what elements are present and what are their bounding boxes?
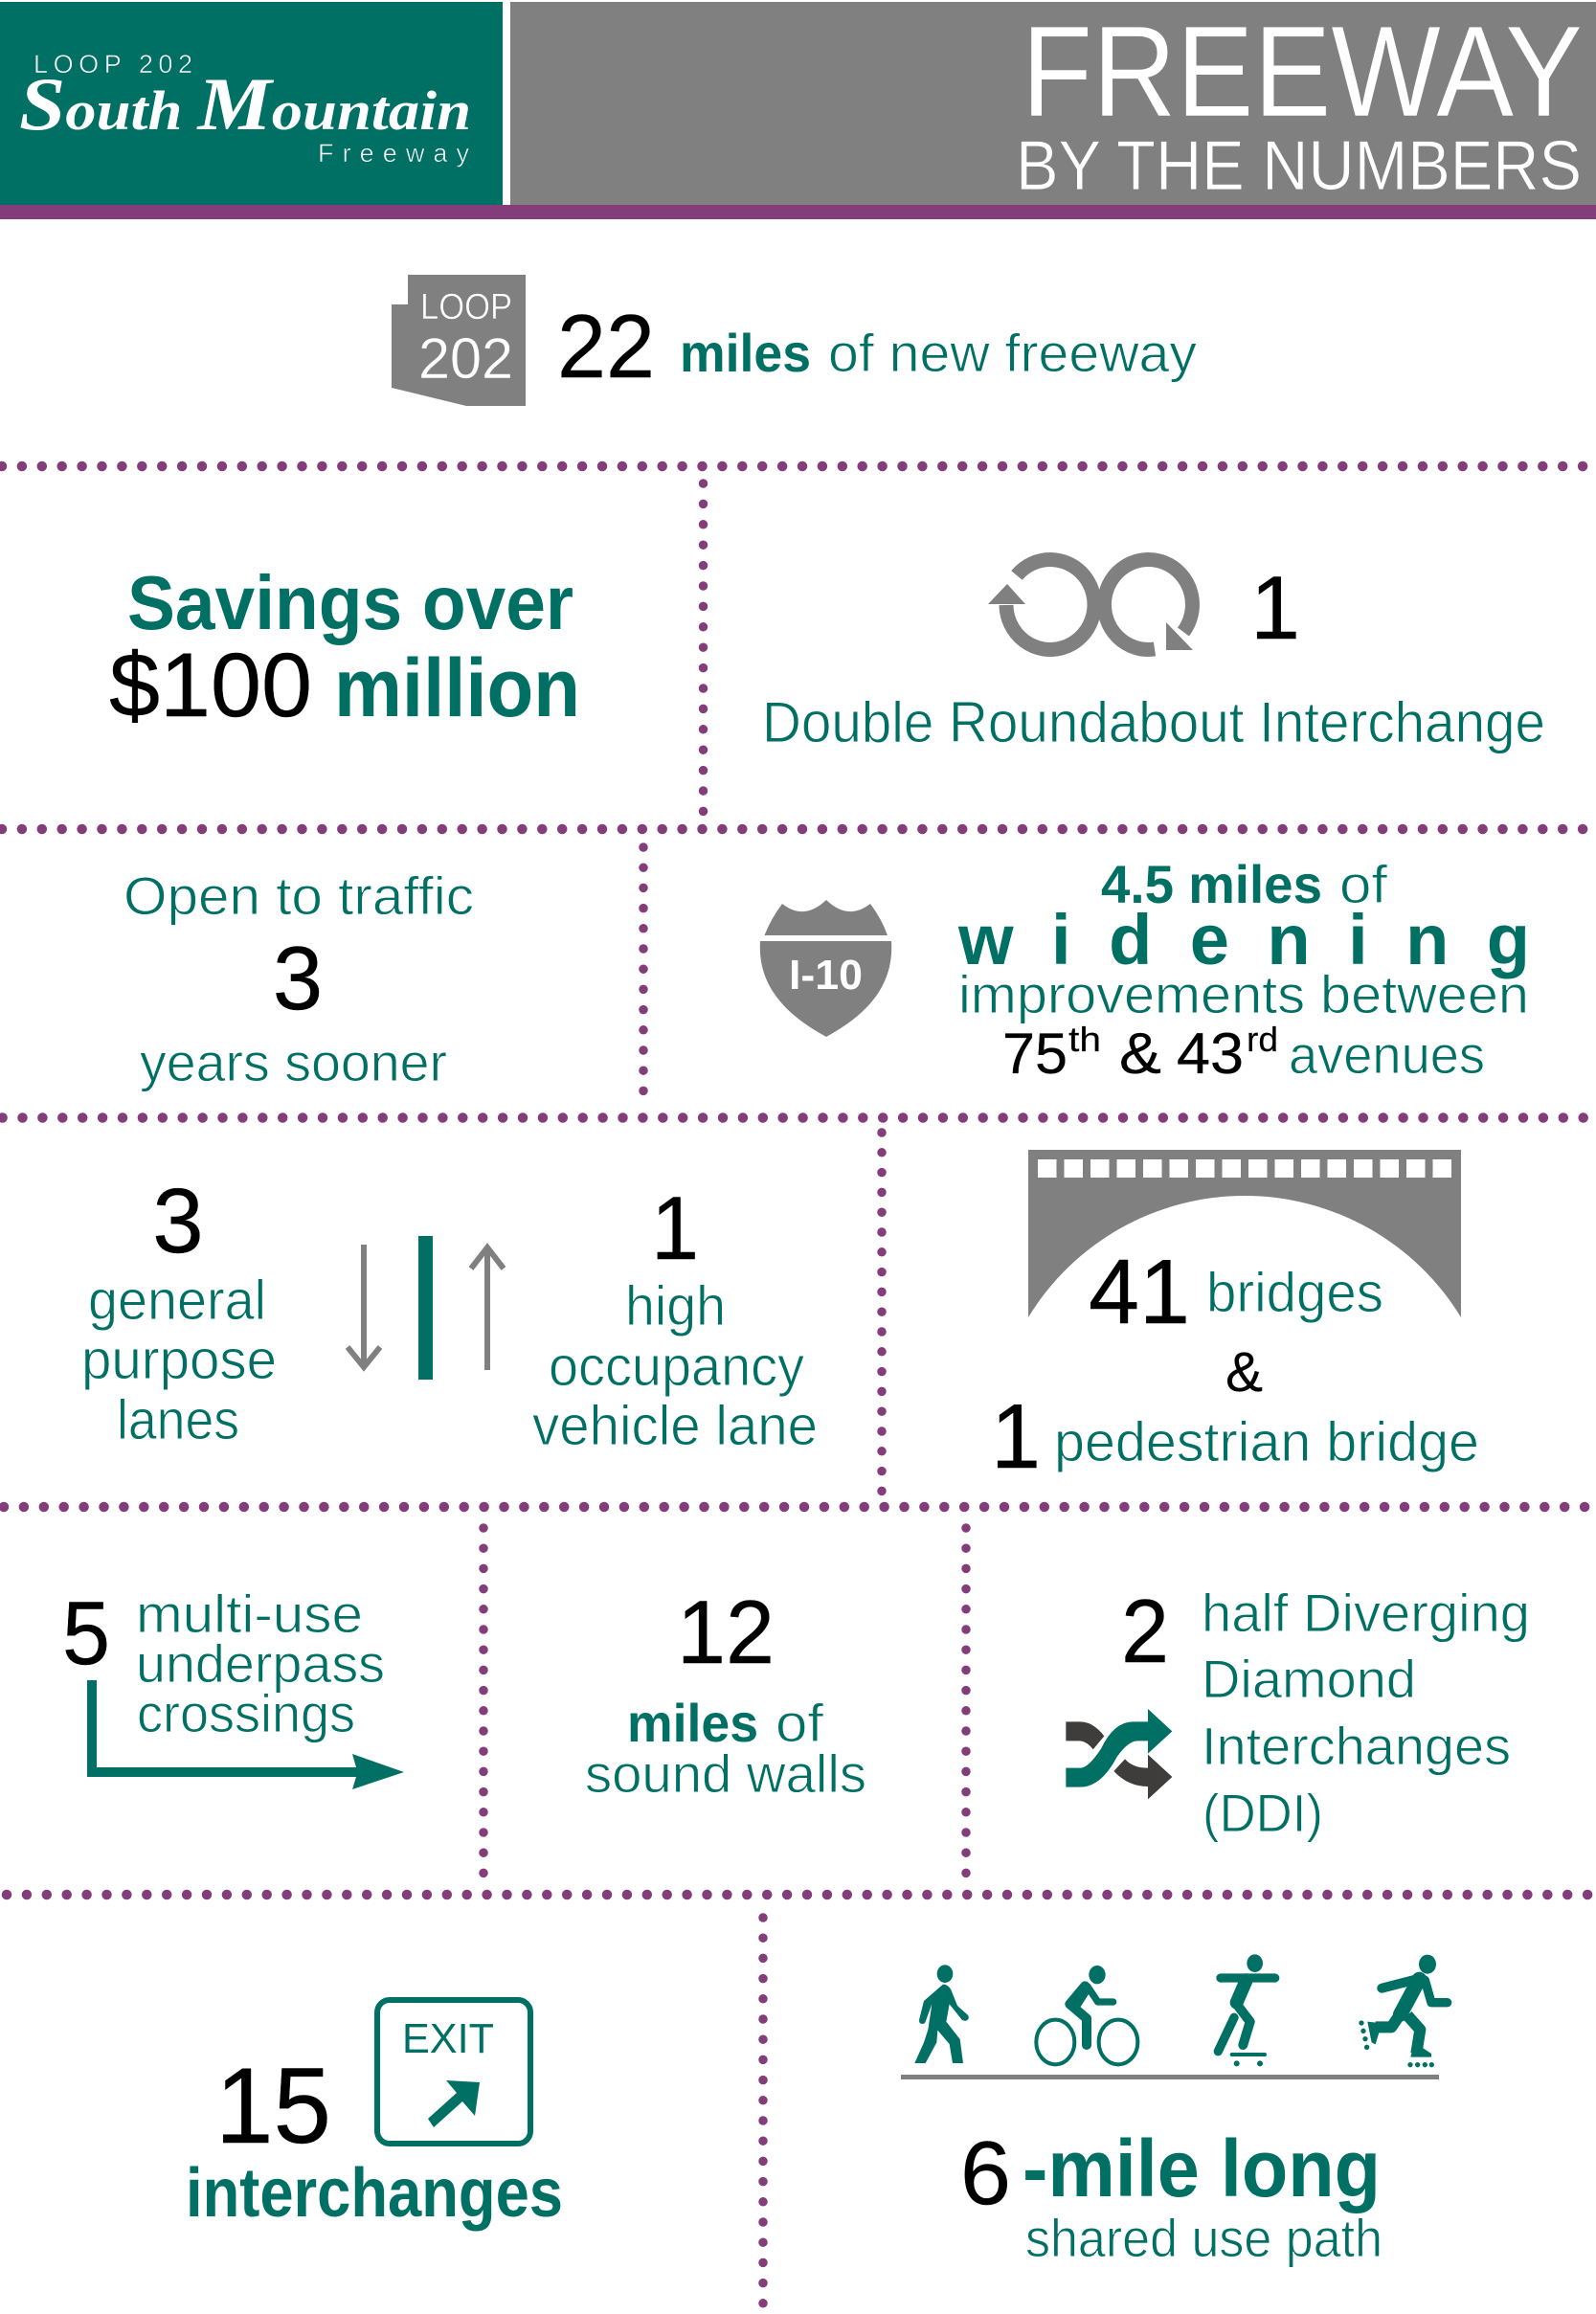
stat: 22 miles of new freeway: of new freeway xyxy=(828,323,1197,383)
icon: I-10 interstate shield xyxy=(760,900,891,1037)
stat: 2 half diverging diamond interchanges: half Diverging xyxy=(1202,1583,1530,1643)
stat: open to traffic 3 years sooner: years sooner xyxy=(140,1032,447,1092)
icon: I-10 interstate shield: I-10 xyxy=(789,952,863,999)
stat: 3 general purpose lanes: general xyxy=(88,1269,266,1332)
header banner xyxy=(0,0,1596,219)
icon: crossover arrows xyxy=(1066,1709,1172,1799)
icon: exit sign xyxy=(377,2000,530,2144)
stat: I-10 widening: 43 xyxy=(1177,1022,1244,1086)
stat: double roundabout interchange: 1 xyxy=(1250,557,1300,658)
stat: 6-mile long shared use path: 6 xyxy=(960,2123,1011,2223)
stat: 1 high occupancy vehicle lane: occupancy xyxy=(549,1336,804,1398)
stat: open to traffic 3 years sooner xyxy=(124,865,474,1092)
stat: 6-mile long shared use path: shared use path xyxy=(1025,2208,1382,2268)
stat: 22 miles of new freeway: miles xyxy=(680,323,811,383)
icon: lane direction arrows and median xyxy=(348,1236,504,1380)
stat: 41 bridges and 1 pedestrian bridge: bridges xyxy=(1206,1262,1383,1324)
stat: 12 miles of sound walls: miles xyxy=(627,1693,758,1753)
stat: 12 miles of sound walls: sound walls xyxy=(585,1743,866,1804)
stat: double roundabout interchange: Double Roundabout Interchange xyxy=(762,690,1545,754)
stat: 3 general purpose lanes xyxy=(81,1170,277,1451)
stat: savings over $100 million: million xyxy=(334,642,580,734)
stat: 2 half diverging diamond interchanges: 2 xyxy=(1121,1581,1169,1681)
stat: I-10 widening: 4.5 miles xyxy=(1101,854,1322,914)
stat: 12 miles of sound walls: of xyxy=(776,1693,823,1753)
stat: 5 multi-use underpass crossings: crossings xyxy=(137,1683,355,1743)
stat: 41 bridges and 1 pedestrian bridge: & xyxy=(1225,1341,1263,1404)
stat: 22 miles of new freeway: 22 xyxy=(557,296,655,396)
stat: 22 miles of new freeway xyxy=(392,275,1197,406)
dotted dividers xyxy=(2,461,1594,471)
path surface line xyxy=(901,2075,1439,2079)
stat: 1 high occupancy vehicle lane: high xyxy=(625,1275,726,1337)
stat: double roundabout interchange xyxy=(762,557,1545,754)
stat: I-10 widening: 75 xyxy=(1002,1022,1068,1086)
purple rule xyxy=(0,205,1596,219)
logo panel: South Mountain xyxy=(19,62,471,146)
icon: Arizona loop 202 shield: LOOP xyxy=(420,287,512,327)
stat: 41 bridges and 1 pedestrian bridge xyxy=(991,1150,1479,1488)
logo panel: Freeway xyxy=(318,139,469,168)
stat: 12 miles of sound walls: 12 xyxy=(677,1582,775,1682)
icon: arch bridge xyxy=(1028,1150,1461,1317)
stat: open to traffic 3 years sooner: Open to traffic xyxy=(124,865,474,926)
icon: inline skater xyxy=(1359,1955,1448,2067)
stat: 41 bridges and 1 pedestrian bridge: pedestrian bridge xyxy=(1054,1411,1479,1473)
stat: 41 bridges and 1 pedestrian bridge: 41 xyxy=(1089,1241,1190,1343)
stat: 6-mile long shared use path: -mile long xyxy=(1023,2123,1381,2213)
stat: 2 half diverging diamond interchanges: Diamond xyxy=(1202,1649,1416,1709)
logo panel xyxy=(0,2,503,205)
icon: Arizona loop 202 shield: 202 xyxy=(418,326,513,391)
arrow: underpass path xyxy=(87,1680,404,1789)
icon: double roundabout xyxy=(988,559,1193,650)
title panel xyxy=(510,0,1596,205)
icon: Arizona loop 202 shield xyxy=(392,275,526,406)
stat: 2 half diverging diamond interchanges: (DDI) xyxy=(1203,1783,1323,1843)
logo panel: LOOP 202 xyxy=(34,50,192,79)
stat: I-10 widening: avenues xyxy=(1289,1024,1485,1085)
stat: open to traffic 3 years sooner: 3 xyxy=(273,928,323,1028)
stat: 41 bridges and 1 pedestrian bridge: 1 xyxy=(991,1385,1041,1488)
stat: 15 interchanges: 15 xyxy=(215,2046,331,2166)
stat: 5 multi-use underpass crossings xyxy=(62,1583,404,1789)
stat: I-10 widening: th xyxy=(1068,1020,1101,1059)
stat: savings over $100 million: $100 xyxy=(109,635,312,736)
stat: 3 general purpose lanes: 3 xyxy=(152,1170,204,1272)
stat: I-10 widening xyxy=(760,854,1530,1086)
icon: walker xyxy=(914,1965,969,2063)
stat: 5 multi-use underpass crossings: multi-use xyxy=(136,1584,363,1644)
stat: 1 high occupancy vehicle lane: 1 xyxy=(651,1178,699,1278)
stat: 3 general purpose lanes: lanes xyxy=(117,1389,239,1451)
stat: I-10 widening: improvements between xyxy=(958,964,1529,1024)
stat: I-10 widening: rd xyxy=(1247,1020,1278,1059)
stat: 5 multi-use underpass crossings: 5 xyxy=(62,1583,110,1683)
stat: 1 high occupancy vehicle lane xyxy=(532,1178,818,1457)
stat: 15 interchanges xyxy=(186,2000,563,2232)
icons: path users xyxy=(914,1954,1448,2067)
stat: 2 half diverging diamond interchanges: Interchanges xyxy=(1202,1716,1511,1776)
icon: cyclist xyxy=(1036,1966,1137,2064)
stat: savings over $100 million xyxy=(109,560,580,736)
stat: 5 multi-use underpass crossings: underpass xyxy=(136,1633,385,1694)
stat: 6-mile long shared use path xyxy=(901,1954,1448,2268)
icon: exit sign: EXIT xyxy=(402,2015,494,2062)
stat: 12 miles of sound walls xyxy=(585,1582,866,1804)
stat: 15 interchanges: interchanges xyxy=(186,2155,563,2232)
stat: savings over $100 million: Savings over xyxy=(127,560,573,645)
stat: I-10 widening: of xyxy=(1339,854,1387,914)
stat: 2 half diverging diamond interchanges xyxy=(1066,1581,1530,1843)
stat: I-10 widening: widening xyxy=(957,900,1530,979)
icon: skateboarder xyxy=(1218,1954,1275,2066)
stat: 3 general purpose lanes: purpose xyxy=(81,1329,277,1391)
stat: 1 high occupancy vehicle lane: vehicle lane xyxy=(532,1395,818,1457)
stat: I-10 widening: & xyxy=(1119,1022,1161,1086)
